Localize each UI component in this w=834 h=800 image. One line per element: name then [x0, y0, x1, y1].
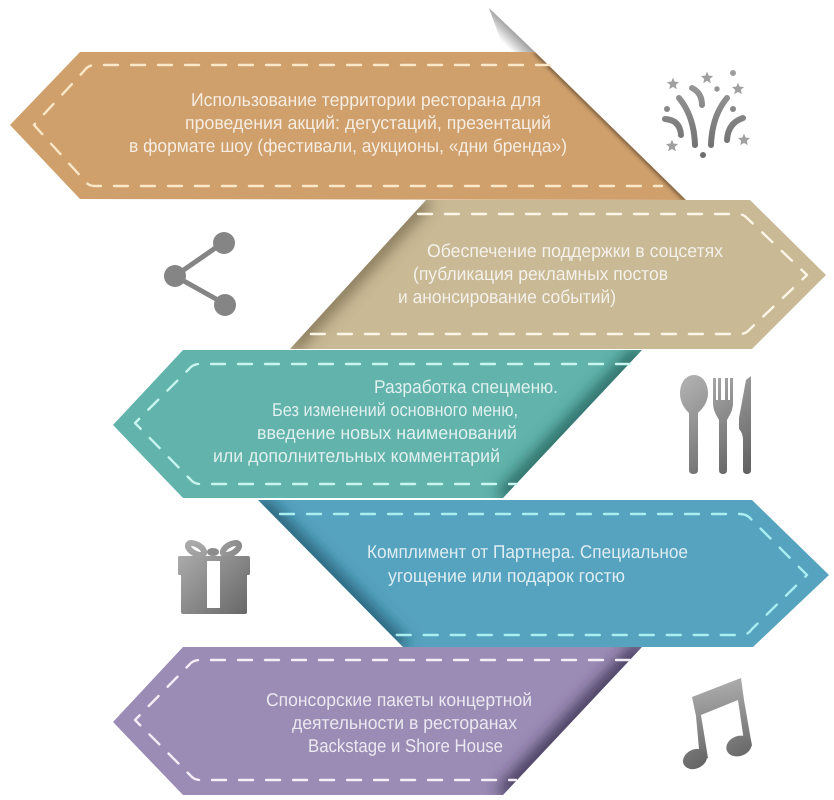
panel: restaurant events: [10, 52, 686, 200]
text: compliment: [367, 541, 688, 586]
page curl shadow: [489, 8, 535, 52]
stitched border: [308, 214, 807, 334]
text: special menu: [213, 376, 558, 466]
panel: blue compliment: [258, 500, 829, 647]
text: social media support: Обеспечение поддержки в соцсетях: [427, 240, 724, 261]
text: restaurant events: проведения акций: дегустаций, презентаций: [185, 112, 551, 133]
stitched border: [280, 514, 807, 635]
text: sponsor packages: [266, 689, 532, 756]
text: social media support: (публикация рекламных постов: [413, 263, 668, 284]
text: social media support: [398, 240, 724, 307]
icon: fireworks: [664, 70, 750, 158]
stitched border: [135, 660, 630, 780]
text: social media support: и анонсирование событий): [398, 286, 616, 307]
text: compliment: Комплимент от Партнера. Специальное: [367, 541, 688, 562]
text: restaurant events: Использование территории ресторана для: [191, 89, 541, 110]
text: special menu: или дополнительных комментарий: [213, 445, 500, 466]
text: special menu: Без изменений основного меню,: [272, 399, 518, 420]
panel: social media support: [290, 200, 826, 349]
panel: special menu: [113, 350, 642, 498]
icon: cutlery: [680, 375, 751, 474]
text: special menu: введение новых наименований: [257, 422, 517, 443]
text: sponsor packages: Backstage и Shore House: [308, 735, 503, 756]
text: compliment: угощение или подарок гостю: [388, 565, 625, 586]
stitched border: [34, 65, 662, 186]
text: restaurant events: в формате шоу (фестивали, аукционы, «дни бренда»): [129, 135, 567, 156]
icon: share: [164, 232, 236, 316]
stitched border: [135, 364, 630, 484]
panel: sponsor packages: [113, 647, 642, 795]
text: sponsor packages: деятельности в ресторанах: [292, 712, 518, 733]
text: restaurant events: [129, 89, 567, 156]
text: special menu: Разработка спецменю.: [374, 376, 558, 397]
icon: music note: [680, 678, 755, 773]
icon: gift: [178, 541, 250, 614]
text: sponsor packages: Спонсорские пакеты концертной: [266, 689, 532, 710]
